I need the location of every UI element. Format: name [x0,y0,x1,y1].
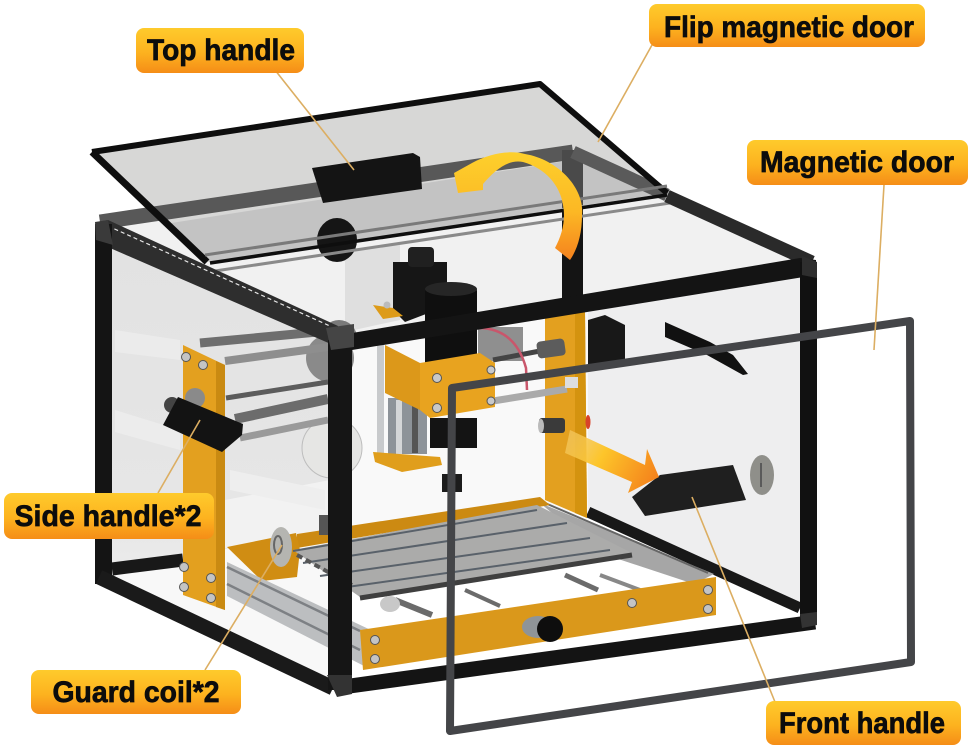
label: magnetic door: Magnetic door [760,146,954,179]
icon: inner door slit [665,322,748,375]
leader: flip door [598,45,652,142]
label: flip magnetic door: Flip magnetic door [664,11,914,44]
stepper right [588,315,625,366]
magnetic door panel [450,321,911,731]
arrow: door moves to handle [565,430,659,493]
inner back bar [100,152,573,222]
leader: side handle [158,420,200,493]
label: top handle: Top handle [147,34,295,67]
grey block [478,327,523,361]
lead screws [395,600,432,615]
flip magnetic door [92,84,667,262]
bed rail ends [297,555,352,585]
hinge strip [205,186,670,271]
lead screw top [493,351,540,360]
label: top handle [136,28,304,73]
front bar [360,577,716,670]
front handle [632,465,746,516]
rods [200,331,328,343]
knob on upright [539,418,565,433]
carriage bracket [373,305,403,319]
enclosure frame [95,196,817,690]
orange plate [227,533,300,581]
carriage [385,345,420,410]
right upright [545,312,587,518]
wheels behind side glass [302,320,362,478]
icon: guard coil left [270,527,292,567]
left upright [183,345,225,610]
icon: knob [522,616,563,642]
leader: guard coil [205,545,282,670]
arrow: flip door curved [454,152,582,260]
motors [393,262,447,322]
label: side handle: Side handle*2 [14,500,202,533]
label: magnetic door [747,140,968,185]
label: side handle [4,493,214,539]
top handle [312,153,422,203]
icon: guard coil right [750,455,774,495]
CNC machine [164,247,716,670]
left rail [227,562,375,668]
leader: front handle [692,497,775,702]
label: guard coil: Guard coil*2 [52,676,220,709]
leader: top handle [275,70,354,170]
label: front handle [766,701,961,745]
back orange bar [297,497,550,548]
bed plate [293,505,632,597]
right rail [540,503,714,584]
side handle [163,397,243,452]
enclosure interior glass [100,150,812,690]
wire [478,328,527,390]
label: guard coil [31,670,241,714]
leader: magnetic door [874,185,884,350]
z axis [377,342,384,454]
frame corner brackets [95,220,817,697]
back corner post [562,190,583,315]
icon: guard coil on back [317,218,357,262]
back bottom frame [112,512,800,608]
rail [493,389,567,401]
label: front handle: Front handle [779,707,945,740]
